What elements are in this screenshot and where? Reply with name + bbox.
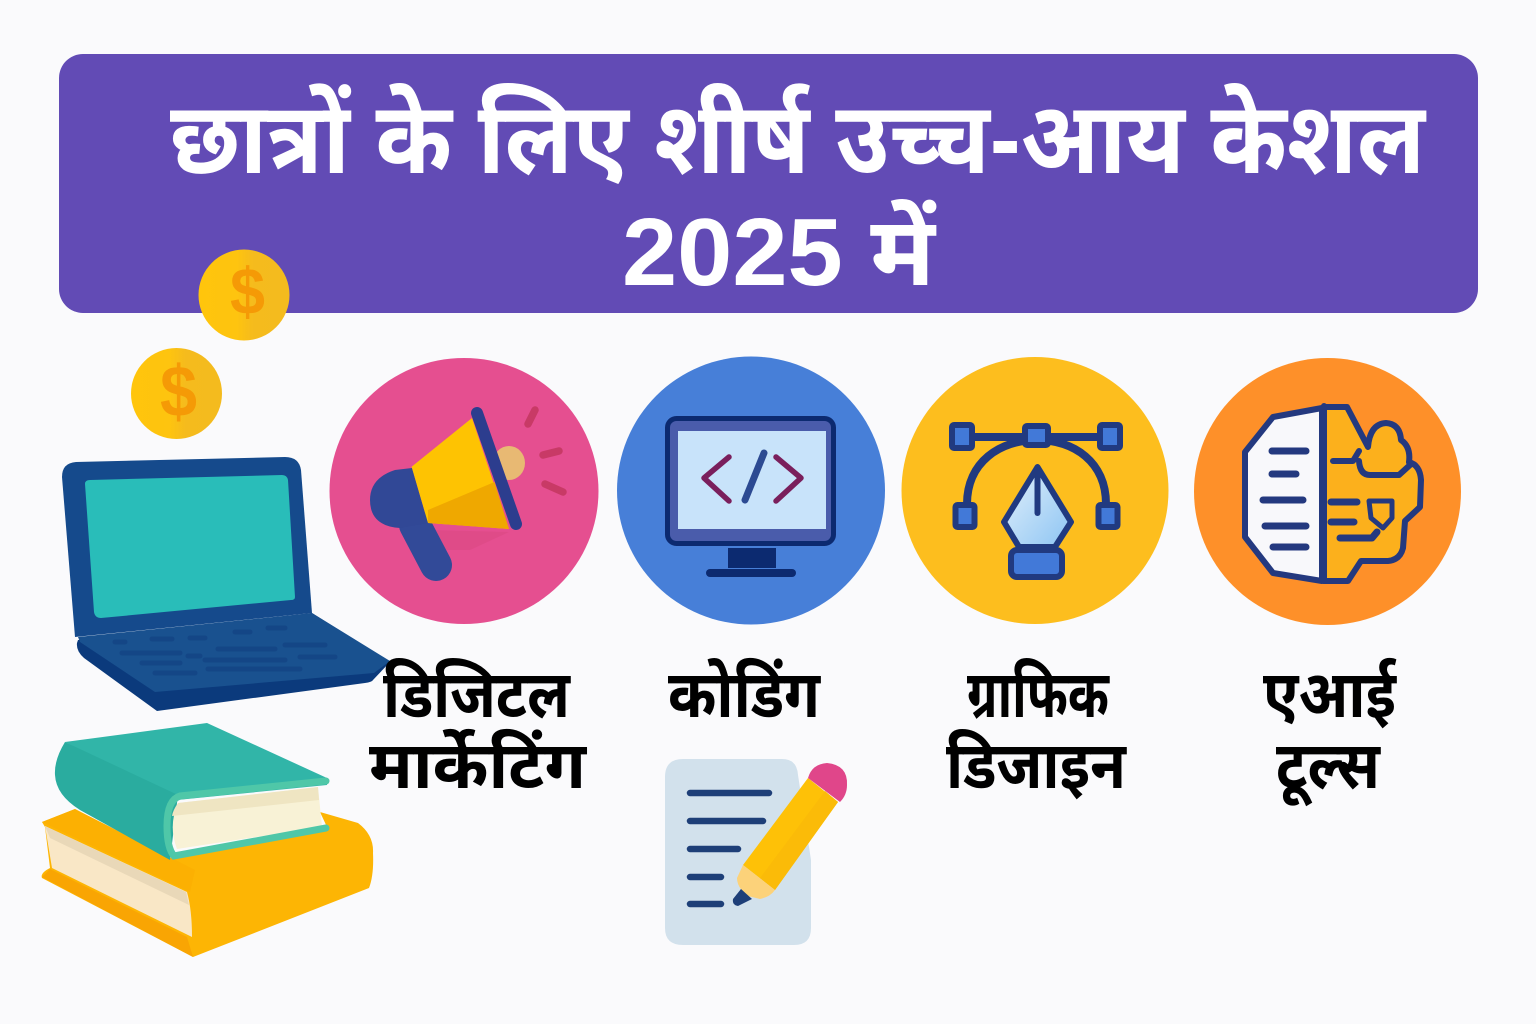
icon circle: pink bbox=[330, 358, 598, 624]
label: एआई bbox=[1263, 657, 1397, 731]
icon circle: yellow bbox=[902, 357, 1168, 624]
label: डिजिटल bbox=[383, 657, 571, 731]
icon circle: orange bbox=[1194, 358, 1461, 625]
label: डिजाइन bbox=[946, 728, 1127, 802]
label: ग्राफिक bbox=[967, 657, 1110, 731]
icon circle: blue bbox=[617, 356, 885, 624]
icon: document and pencil bbox=[665, 759, 847, 945]
icon: megaphone bbox=[370, 410, 563, 565]
teal book bbox=[55, 723, 327, 860]
icon: books bbox=[42, 723, 373, 957]
icon: bezier pen tool bbox=[952, 425, 1120, 577]
title bbox=[170, 83, 1427, 306]
label bbox=[1263, 657, 1397, 807]
label: कोडिंग bbox=[668, 657, 821, 731]
icon: laptop bbox=[62, 457, 390, 711]
icon: monitor with code bbox=[668, 418, 834, 577]
panel: AI tools bbox=[1194, 358, 1461, 807]
icon: coin top bbox=[198, 250, 290, 340]
panel: digital marketing bbox=[330, 358, 598, 802]
icon: coin top: $ bbox=[230, 254, 265, 328]
icon: coin lower bbox=[131, 348, 222, 439]
label: टूल्स bbox=[1276, 728, 1381, 807]
icon: half document half brain bbox=[1245, 406, 1421, 581]
label bbox=[369, 657, 587, 802]
yellow book bbox=[42, 809, 373, 957]
title: छात्रों के लिए शीर्ष उच्च-आय केशल bbox=[170, 83, 1427, 195]
label bbox=[946, 657, 1127, 802]
panel: coding bbox=[617, 356, 885, 731]
label: मार्केटिंग bbox=[369, 728, 587, 802]
header banner bbox=[59, 54, 1478, 313]
icon: coin lower: $ bbox=[160, 352, 197, 432]
panel: graphic design bbox=[902, 357, 1168, 802]
title: 2025 में bbox=[622, 198, 937, 306]
